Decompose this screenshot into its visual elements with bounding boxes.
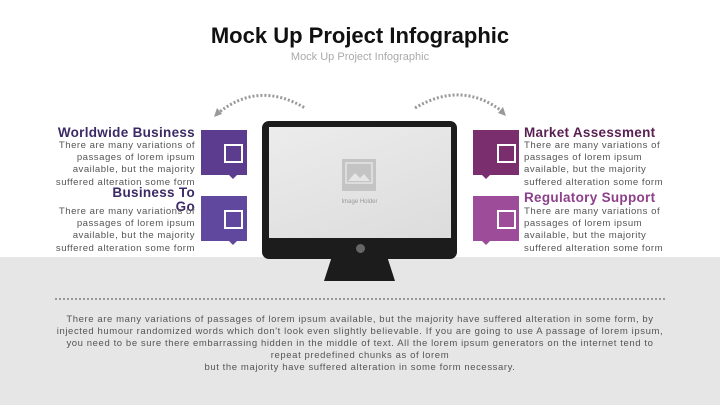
text block: passages of lorem ipsum	[77, 218, 195, 229]
text block: suffered alteration some form	[524, 243, 663, 254]
body text: you need to be sure there embarrassing hidden in the middle of text. All the lorem ipsum generators on the internet tend to	[66, 338, 654, 349]
heading	[112, 185, 195, 214]
text block: suffered alteration some form	[524, 177, 663, 188]
text block: available, but the majority	[73, 164, 195, 175]
text block: passages of lorem ipsum	[524, 218, 642, 229]
heading: Go	[176, 199, 195, 214]
heading: Business To	[112, 185, 195, 200]
heading: Worldwide Business	[58, 125, 195, 140]
text block: available, but the majority	[524, 230, 646, 241]
panel: market assessment	[524, 125, 663, 188]
text block	[56, 206, 195, 254]
text block: There are many variations of	[59, 206, 195, 217]
text block: suffered alteration some form	[56, 243, 195, 254]
body text	[57, 314, 663, 373]
heading: Regulatory Support	[524, 190, 655, 205]
text block: There are many variations of	[524, 206, 660, 217]
subtitle: Mock Up Project Infographic	[291, 51, 429, 63]
text block: available, but the majority	[524, 164, 646, 175]
panel: worldwide business	[56, 125, 195, 188]
title: Mock Up Project Infographic	[211, 23, 509, 48]
icon box: plum 1	[473, 130, 519, 175]
text block: There are many variations of	[524, 140, 660, 151]
monitor	[262, 121, 457, 281]
body text: There are many variations of passages of lorem ipsum available, but the majority have suffered alteration in some form, by	[66, 314, 654, 325]
arrow: right arc	[415, 95, 506, 116]
icon box: plum 2	[473, 196, 519, 241]
body text: injected humour randomized words which don't look even slightly believable. If you are going to use A passage of lorem ipsum,	[57, 326, 663, 337]
icon box: purple 2	[201, 196, 247, 241]
text block	[56, 140, 195, 188]
icon box: purple 1	[201, 130, 247, 175]
body text: but the majority have suffered alteration in some form necessary.	[204, 362, 516, 373]
text block	[524, 140, 663, 188]
text block: available, but the majority	[73, 230, 195, 241]
panel: regulatory support	[524, 190, 663, 254]
text block	[524, 206, 663, 254]
text block: There are many variations of	[59, 140, 195, 151]
text block: passages of lorem ipsum	[524, 152, 642, 163]
heading: Market Assessment	[524, 125, 655, 140]
body text: repeat predefined chunks as of lorem	[271, 350, 449, 361]
panel: business to go	[56, 185, 195, 254]
background band	[0, 257, 720, 405]
divider	[55, 298, 665, 300]
arrow: left arc	[214, 95, 305, 117]
text block: suffered alteration some form	[56, 177, 195, 188]
monitor: Image Holder	[341, 199, 378, 205]
icon: image placeholder	[342, 159, 376, 191]
text block: passages of lorem ipsum	[77, 152, 195, 163]
